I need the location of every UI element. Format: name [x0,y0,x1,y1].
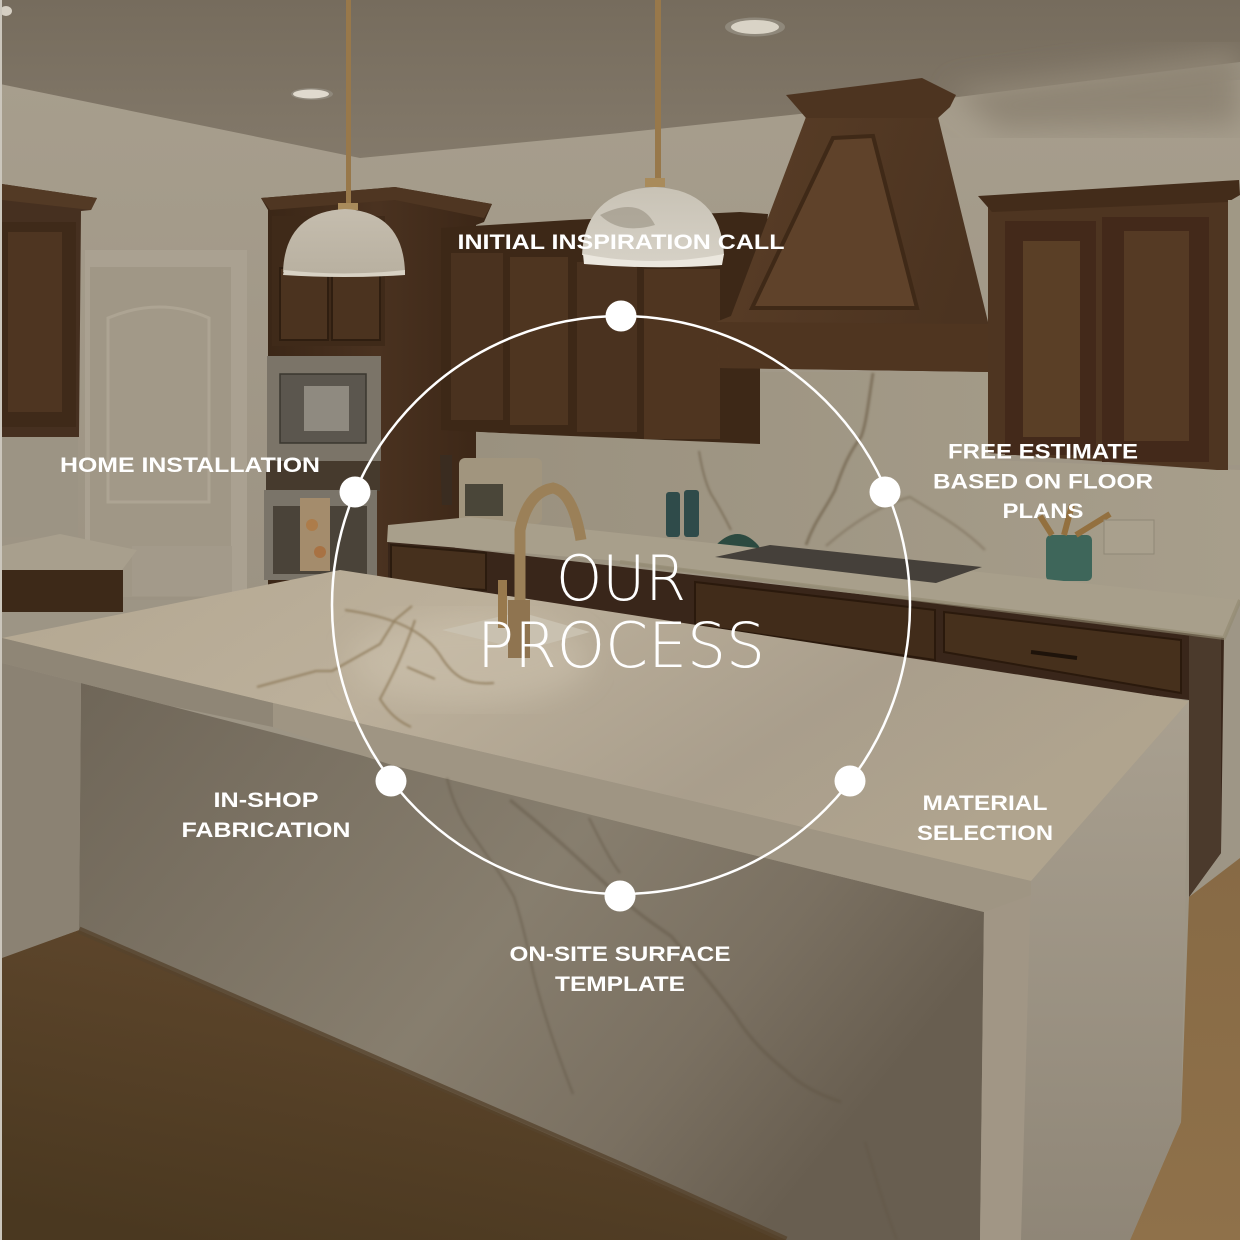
pendant lamp left [283,0,405,277]
step label: material selection: SELECTION [917,821,1053,845]
sink and faucet [442,488,590,658]
left cabinet [2,184,97,537]
island top front edge [273,703,1031,912]
upper cabinets [441,212,768,444]
title: OUR [556,542,686,615]
step label: in-shop fabrication [182,788,350,842]
recessed lights [0,6,785,100]
step label: material selection: MATERIAL [922,791,1048,815]
step label: home installation: HOME INSTALLATION [60,453,320,477]
tall cabinet [261,187,492,600]
ceiling [0,0,1240,158]
island end panel [1021,701,1189,1240]
wood floor [0,930,790,1240]
microwave and oven [264,356,381,580]
island left return [2,663,81,958]
island base shadow [79,930,786,1240]
cooktop [715,545,982,583]
ceiling fade at right [950,50,1240,130]
process ring [332,316,910,894]
waterfall side strip [980,881,1031,1240]
title: PROCESS [477,609,765,682]
step label: free estimate [933,440,1154,523]
right cabinet [978,180,1240,470]
step label: on-site surface template: ON-SITE SURFACE [510,942,730,966]
marble veins [257,606,494,727]
step label: free estimate: FREE ESTIMATE [948,440,1138,464]
wall at right of post [1221,600,1240,860]
step label: free estimate: PLANS [1002,499,1084,523]
title [477,542,765,682]
lower back cabinets [388,540,1224,897]
step label: material selection [917,791,1053,845]
door [85,250,247,597]
step label: free estimate: BASED ON FLOOR [933,470,1154,494]
island front face [79,683,984,1240]
back countertop [387,517,1240,638]
range hood [716,78,990,372]
step label: on-site surface template [510,942,730,996]
countertop items [440,455,1154,581]
far-left counter [2,534,137,612]
step label: in-shop fabrication: FABRICATION [182,818,350,842]
step label: on-site surface template: TEMPLATE [555,972,685,996]
step label: in-shop fabrication: IN-SHOP [214,788,318,812]
pendant lamp right [582,0,724,267]
island top [2,570,1189,881]
step nodes [340,300,900,912]
step label: initial inspiration call: INITIAL INSPIRATION CALL [458,230,784,254]
photo left edge [0,0,2,1240]
top highlight [350,615,590,705]
backsplash [476,372,1240,610]
walls [0,80,1240,600]
